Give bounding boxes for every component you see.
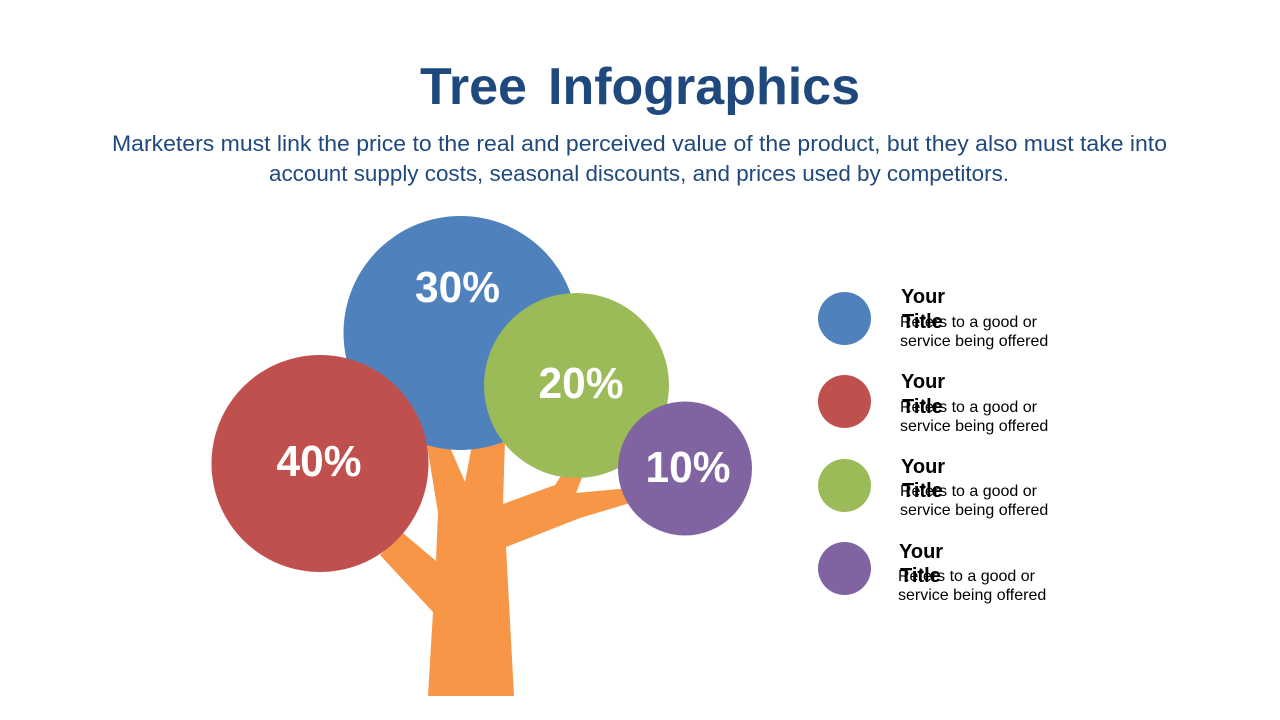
circle: 40%: 40% [276, 437, 362, 486]
subtitle text block: account supply costs, seasonal discounts, and prices used by competitors. [269, 161, 1009, 186]
circle: 30%: 30% [415, 263, 500, 312]
legend [818, 286, 1048, 604]
legend item: purple: Your [899, 541, 943, 563]
legend item: blue: Refers to a good or [900, 314, 1038, 331]
legend item: red: service being offered [900, 418, 1048, 435]
title: Infographics [548, 58, 860, 116]
circle: 30% [344, 216, 578, 450]
legend item: green: Title [902, 480, 943, 502]
legend item: purple: Refers to a good or [898, 568, 1036, 585]
legend item: green: Refers to a good or [900, 483, 1038, 500]
legend item: green: service being offered [900, 502, 1048, 519]
circle: 20%: 20% [538, 359, 624, 408]
circle: 10%: 10% [646, 443, 730, 492]
legend item: red [818, 371, 1048, 435]
legend item: red: Title [902, 396, 943, 418]
legend item: blue: service being offered [900, 333, 1048, 350]
legend item: purple: service being offered [898, 587, 1046, 604]
subtitle text block [112, 131, 1167, 186]
legend item: purple [818, 541, 1046, 604]
legend item: purple: Title [900, 565, 941, 587]
circle: 40% [212, 355, 428, 572]
legend item: red: Your [901, 371, 945, 393]
legend item: blue: Your [901, 286, 945, 308]
legend item: green [818, 456, 1048, 519]
legend item: red: Refers to a good or [900, 399, 1038, 416]
legend item: blue: Title [902, 311, 943, 333]
circle: 20% [484, 293, 669, 478]
legend item: green: Your [901, 456, 945, 478]
circle: 10% [618, 402, 752, 536]
subtitle text block: Marketers must link the price to the real and perceived value of the product, but they also must take into [112, 131, 1167, 156]
tree chart [212, 216, 752, 696]
tree trunk and branches [380, 440, 640, 696]
title: Tree [420, 58, 527, 116]
legend item: blue [818, 286, 1048, 350]
